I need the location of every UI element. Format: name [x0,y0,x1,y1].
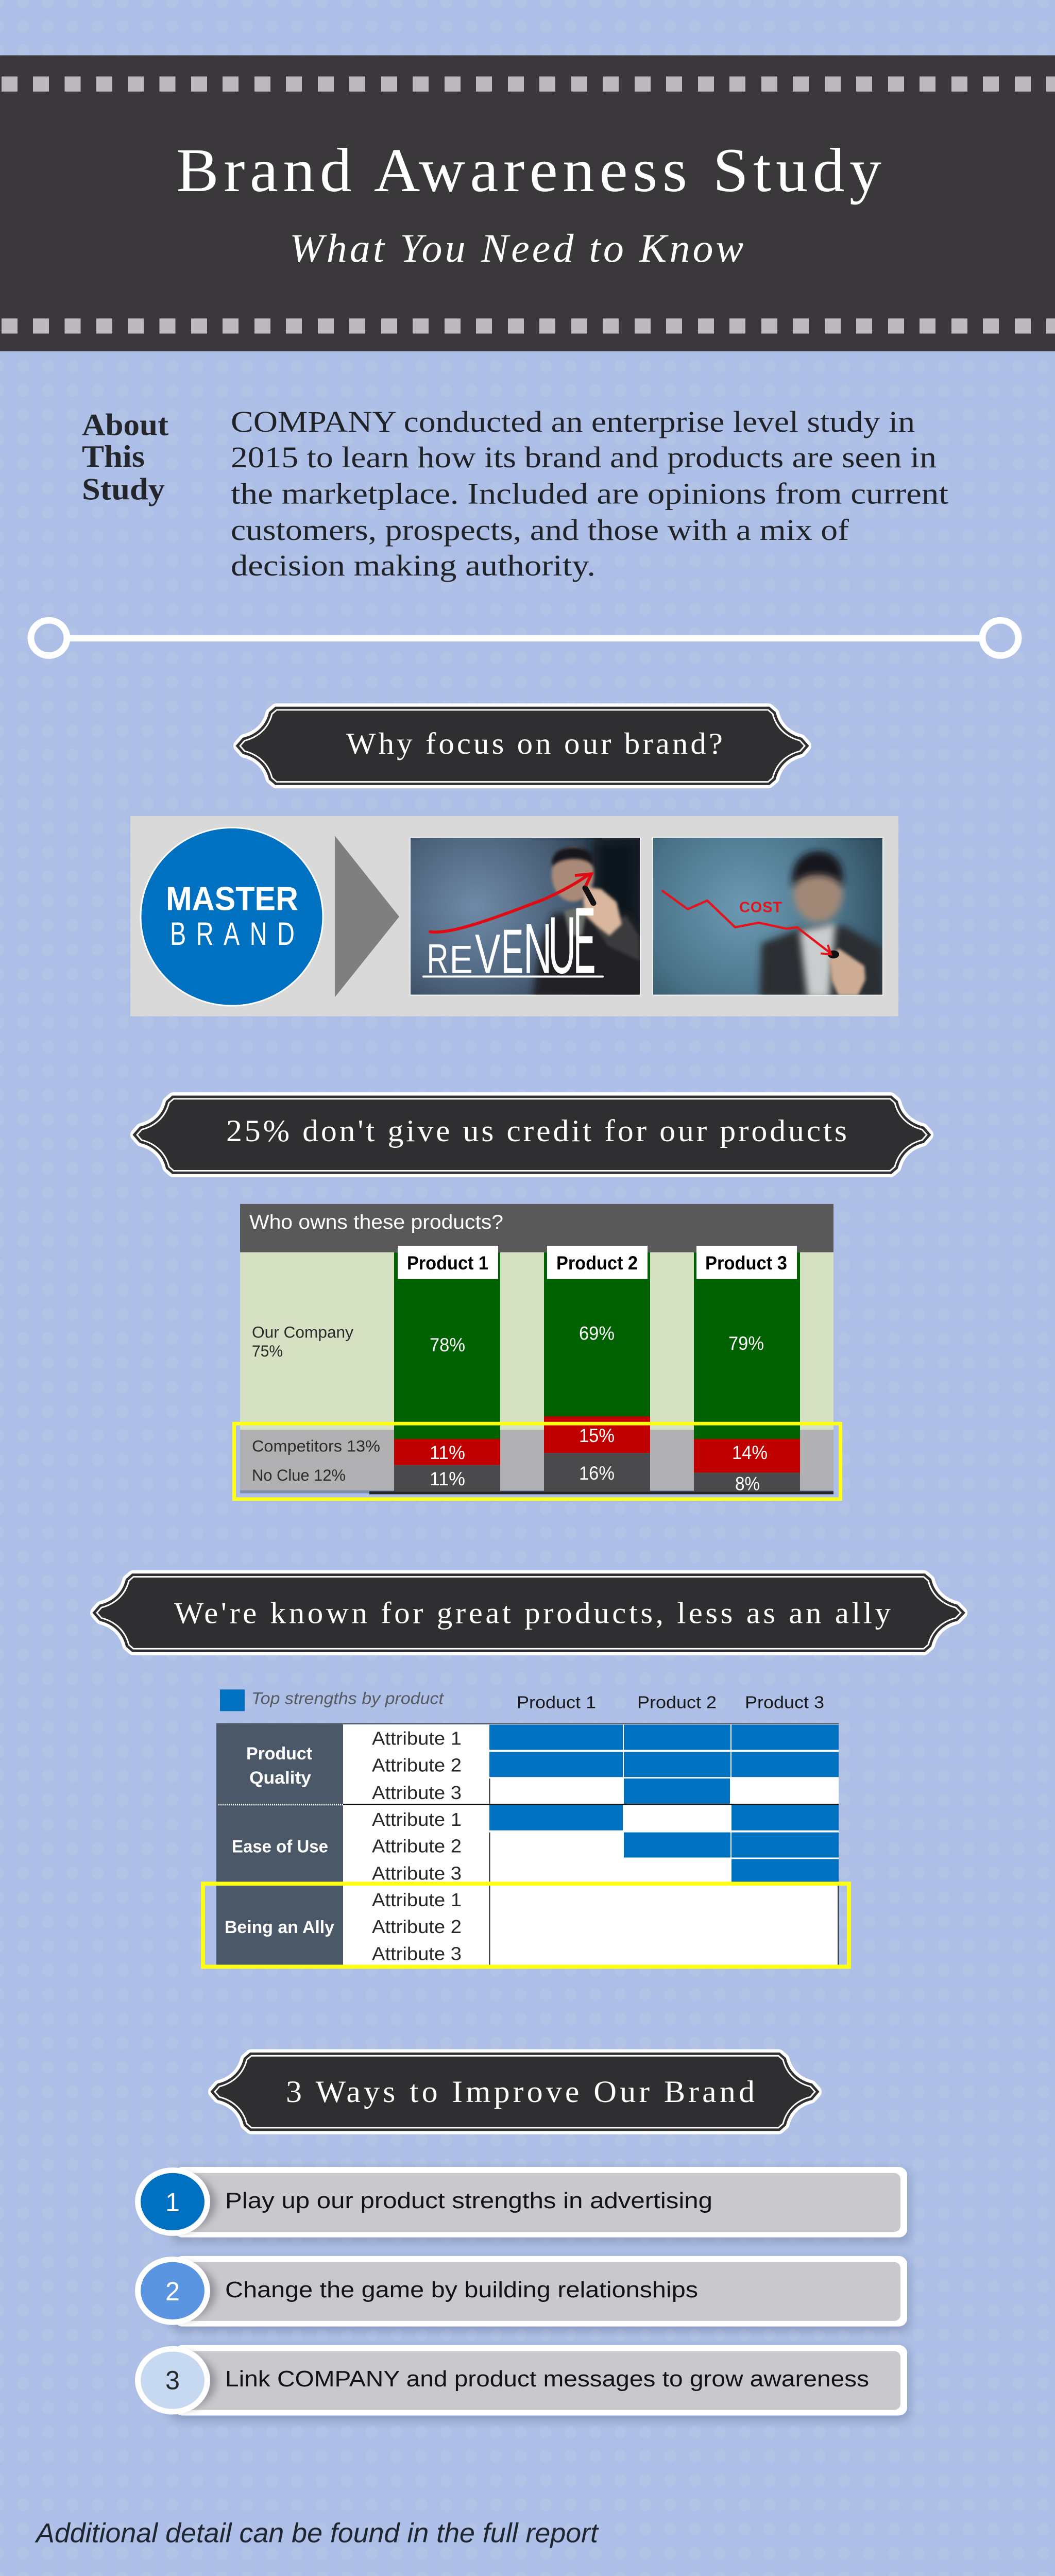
bottom film-strip squares [2,318,1055,333]
bar: product 3: Product 3 [705,1252,787,1274]
about body text: COMPANY conducted an enterprise level study in [231,405,915,438]
about body text: customers, prospects, and those with a mix of [231,513,849,547]
about heading: About [82,408,169,443]
icon: master brand circle: BRAND [170,916,295,952]
step 3: 3 [165,2365,180,2395]
category column: Being an Ally [225,1918,335,1937]
title: Brand Awareness Study [176,135,881,205]
column headers [517,1693,824,1712]
category column: Quality [249,1768,312,1788]
about body text [231,405,949,582]
attribute labels: Attribute 1 [372,1890,462,1910]
table: top strengths by product [203,1689,849,1967]
panel: master brand drives revenue and cost [130,816,898,1016]
about body text: the marketplace. Included are opinions from current [231,477,949,510]
attribute labels: Attribute 2 [372,1836,462,1857]
subtitle: What You Need to Know [290,227,743,271]
bar: product 1: 11% [430,1468,465,1489]
category column: Ease of Use [232,1837,328,1857]
heading text: 3 Ways to Improve Our Brand [286,2075,755,2109]
bar: product 2: 69% [579,1323,615,1344]
image: cost [652,837,883,998]
cost label: COST [739,900,782,916]
bar: product 1: 11% [430,1442,465,1463]
bar: product 3: 8% [735,1473,760,1494]
row labels: 75% [252,1342,283,1360]
heading text: Why focus on our brand? [346,727,723,761]
row backgrounds [240,1252,833,1494]
heading text: We're known for great products, less as an ally [174,1596,891,1630]
attribute labels: Attribute 1 [372,1728,462,1749]
revenue lettering: E [573,889,595,994]
revenue lettering [427,889,595,994]
chart title bar: Who owns these products? [249,1211,503,1233]
column headers: Product 2 [637,1693,717,1712]
step text: Link COMPANY and product messages to grow awareness [225,2366,869,2392]
arrow [335,836,399,997]
yellow highlight box [234,1423,841,1499]
image: revenue [410,837,644,998]
step 1 [135,2167,910,2243]
column headers: Product 3 [745,1693,824,1712]
about heading [82,408,169,507]
bar: product 1 [394,1246,500,1492]
attribute labels [372,1728,462,1964]
step text: Play up our product strengths in advertising [225,2189,712,2213]
row labels: Our Company [252,1323,353,1342]
row labels [252,1323,380,1484]
step 1: 1 [165,2188,180,2217]
bar: product 1: Product 1 [407,1252,488,1274]
bar: product 2 [544,1246,650,1492]
step text: Change the game by building relationships [225,2277,698,2302]
column headers: Product 1 [517,1693,596,1712]
revenue lettering: U [548,900,576,991]
bar: product 2: 16% [579,1462,615,1484]
legend: Top strengths by product [251,1689,445,1708]
heading plaque: why focus [240,710,805,782]
header banner [0,55,1055,351]
attribute labels: Attribute 3 [372,1943,462,1964]
yellow highlight box [203,1884,849,1967]
top film-strip squares [2,76,1055,92]
about heading: Study [82,472,165,507]
step 3 [135,2345,910,2421]
attribute labels: Attribute 2 [372,1755,462,1775]
strength cells [489,1725,839,1884]
icon: master brand circle [141,827,323,1006]
row labels: No Clue 12% [252,1466,346,1484]
table body [343,1723,839,1964]
bar: product 2: Product 2 [556,1252,638,1274]
table lines [216,1724,839,1964]
revenue lettering: R [427,935,448,982]
attribute labels: Attribute 2 [372,1916,462,1937]
heading plaque: 3 ways [215,2056,815,2128]
attribute labels: Attribute 3 [372,1863,462,1884]
revenue lettering: E [450,938,473,982]
bar: product 3 [694,1246,800,1494]
icon: master brand circle: MASTER [166,880,298,917]
step 2: 2 [165,2276,180,2306]
bar: product 3: 79% [728,1333,764,1354]
revenue lettering: N [523,909,552,988]
heading plaque: known for great products [97,1577,961,1649]
chart title bar [240,1204,833,1252]
bar: product 2: 15% [579,1425,615,1446]
footer note: Additional detail can be found in the full report [35,2518,599,2548]
about body text: 2015 to learn how its brand and products are seen in [231,440,937,474]
row labels: Competitors 13% [252,1437,380,1455]
bar: product 1: 78% [430,1334,465,1355]
divider with end circles [31,620,1018,655]
attribute labels: Attribute 3 [372,1783,462,1803]
heading plaque: 25% credit [137,1099,927,1171]
chart: who owns these products [234,1204,841,1499]
about body text: decision making authority. [231,549,595,582]
attribute labels: Attribute 1 [372,1809,462,1830]
revenue lettering: V [475,923,501,985]
heading text: 25% don't give us credit for our products [226,1113,847,1148]
step 2 [135,2256,910,2332]
category column: Product [246,1744,312,1764]
about heading: This [82,439,145,474]
revenue lettering: E [501,916,523,987]
category column [216,1723,343,1964]
bar: product 3: 14% [732,1442,768,1463]
